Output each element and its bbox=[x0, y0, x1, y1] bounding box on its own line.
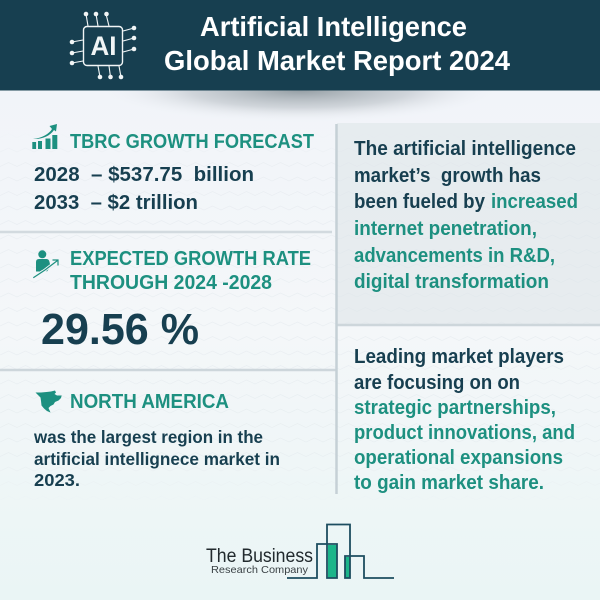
icon: North America map bbox=[36, 390, 62, 412]
icon: AI chip: AI bbox=[90, 31, 116, 61]
logo: The Business Research Company: The Business bbox=[206, 545, 313, 567]
text block: largest region bbox=[33, 427, 280, 490]
heading: expected growth rate bbox=[70, 247, 311, 294]
title: Artificial Intelligence bbox=[200, 11, 467, 42]
stat: growth rate: 29.56 % bbox=[41, 305, 199, 354]
text block: largest region: 2023. bbox=[34, 470, 80, 490]
forecast values: 2033 – $2 trillion bbox=[34, 191, 198, 214]
heading: North America: NORTH AMERICA bbox=[70, 390, 229, 413]
text block: market growth drivers: advancements in R&D, bbox=[354, 244, 555, 267]
heading: expected growth rate: EXPECTED GROWTH RATE bbox=[70, 247, 311, 270]
text block: market growth drivers: market’s growth has bbox=[354, 164, 541, 187]
title bbox=[164, 11, 510, 76]
text block: market growth drivers: increased bbox=[491, 190, 578, 213]
text block: market player strategies: strategic partnerships, bbox=[354, 396, 556, 419]
logo: The Business Research Company bbox=[206, 524, 394, 578]
icon: AI chip bbox=[70, 12, 136, 79]
icon: person with growth arrow bbox=[33, 250, 58, 278]
heading: expected growth rate: THROUGH 2024 -2028 bbox=[70, 271, 272, 294]
text block: market growth drivers: internet penetration, bbox=[354, 217, 537, 240]
header banner bbox=[0, 0, 600, 90]
text block: market player strategies: to gain market share. bbox=[354, 471, 544, 494]
panel: market growth drivers background bbox=[337, 123, 600, 325]
text block: largest region: was the largest region in the bbox=[33, 427, 263, 447]
text block: market player strategies: Leading market players bbox=[354, 345, 564, 368]
text block: market growth drivers: The artificial intelligence bbox=[354, 137, 576, 160]
text block: market growth drivers bbox=[354, 137, 578, 293]
text block: market growth drivers: been fueled by bbox=[354, 190, 486, 213]
icon: growth bars bbox=[32, 124, 57, 149]
text block: market player strategies: are focusing on on bbox=[354, 371, 520, 394]
text block: market growth drivers: digital transformation bbox=[354, 270, 549, 293]
text block: market player strategies: product innovations, and bbox=[354, 421, 575, 444]
forecast values: 2028 – $537.75 billion bbox=[34, 163, 254, 186]
heading: TBRC growth forecast: TBRC GROWTH FORECAST bbox=[70, 130, 314, 153]
title: Global Market Report 2024 bbox=[164, 45, 510, 76]
text block: largest region: artificial intellignece market in bbox=[34, 449, 280, 469]
forecast values bbox=[34, 163, 254, 214]
logo: The Business Research Company: Research Company bbox=[211, 564, 309, 576]
text block: market player strategies bbox=[354, 345, 575, 494]
header shadow bbox=[100, 90, 500, 122]
text block: market player strategies: operational expansions bbox=[354, 446, 563, 469]
